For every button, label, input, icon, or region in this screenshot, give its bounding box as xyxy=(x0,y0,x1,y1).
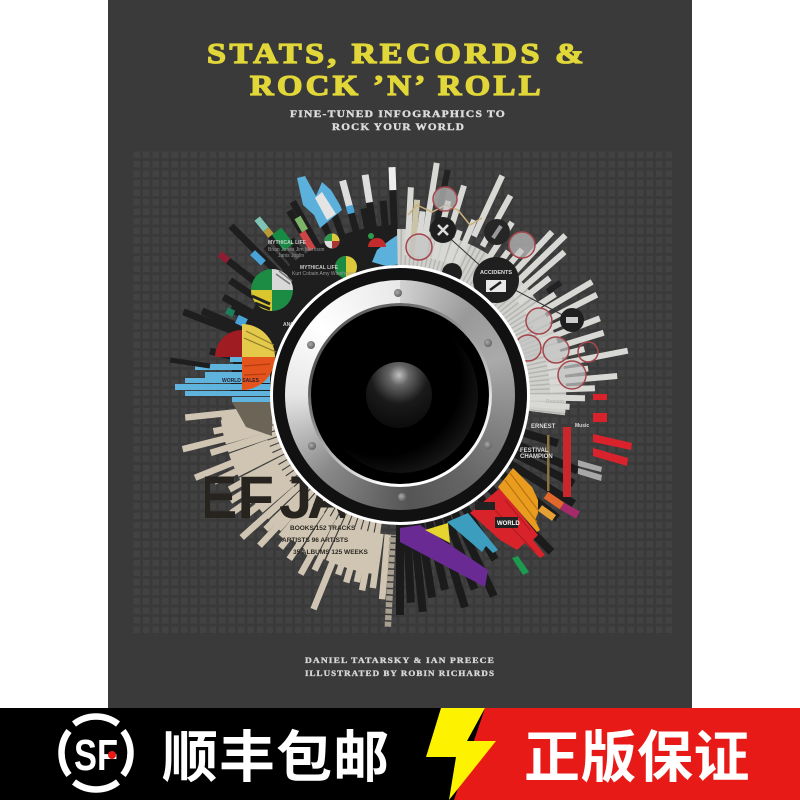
label: Def Jam: J xyxy=(279,464,312,531)
labels: right small text: WORLD xyxy=(497,521,520,527)
subtitle xyxy=(290,110,506,133)
labels: dark tags on red band xyxy=(475,502,518,528)
labels: upper left small text: Brian Jones Jim Morrison xyxy=(268,247,325,253)
ray: green tip xyxy=(512,556,529,575)
sector: black rays lower right xyxy=(400,430,578,615)
book cover artwork xyxy=(108,0,692,708)
sector: brown band xyxy=(232,402,272,436)
radial data burst xyxy=(154,163,632,627)
ray: black left bar xyxy=(170,360,210,366)
speaker: inner rim xyxy=(308,303,492,487)
text: Def Jam stats: BOOKS/152 TRACKS xyxy=(290,525,356,532)
labels: right small text: Music xyxy=(575,423,589,429)
speaker: dust cap xyxy=(366,362,432,428)
labels: right small text: CHAMPION xyxy=(520,454,553,460)
banner: red panel and lightning bolt xyxy=(426,708,800,800)
title: ROCK ’N’ ROLL xyxy=(250,70,544,102)
pie: green yellow white xyxy=(251,269,293,311)
authors: DANIEL TATARSKY & IAN PREECE xyxy=(305,655,495,665)
pie: green and yellow xyxy=(335,256,357,278)
sector: red band xyxy=(470,488,545,558)
bars: grey group xyxy=(578,460,602,481)
text: Def Jam stats xyxy=(282,525,369,556)
title xyxy=(207,38,587,102)
speaker: metal ring xyxy=(285,280,515,510)
sector: tan bars lower left xyxy=(183,411,393,627)
bar: thin brown xyxy=(547,435,550,491)
bars: red slanted group xyxy=(593,394,632,466)
badge: small top xyxy=(442,263,462,283)
label: Def Jam: A xyxy=(307,464,350,531)
icon: blue and white block chart xyxy=(297,176,342,228)
authors: ILLUSTRATED BY ROBIN RICHARDS xyxy=(305,668,495,678)
title: STATS, RECORDS & xyxy=(207,38,587,70)
pie: small multi colour xyxy=(324,234,340,248)
badge: small right xyxy=(560,308,584,332)
labels: upper left small text: ANGEL xyxy=(283,322,300,328)
label: Def Jam: DEF xyxy=(154,464,274,531)
badge: guitar icon xyxy=(484,219,510,245)
banner: SF logo xyxy=(58,713,134,793)
ray: orange and magenta xyxy=(546,495,562,506)
coloured ray tips upper left xyxy=(220,167,393,335)
labels: upper left small text: WORLD SALES xyxy=(222,378,260,384)
badge: accidents xyxy=(473,257,519,303)
sector: blue band xyxy=(447,513,498,553)
bar: tall red xyxy=(563,427,571,497)
banner: SF logo: SF xyxy=(74,731,118,780)
pie: red yellow orange xyxy=(215,324,276,390)
sector: dark rays upper left xyxy=(183,167,396,393)
speaker: screws xyxy=(307,289,492,501)
squiggle: tan line chart xyxy=(408,205,482,225)
speaker: cone surround xyxy=(311,306,489,484)
label: Def Jam: M xyxy=(345,464,395,531)
promo banner xyxy=(0,708,800,800)
text: Def Jam stats: ARTISTS 96 ARTISTS xyxy=(282,537,349,544)
labels: upper left small text: MYTHICAL LIFE xyxy=(300,265,339,271)
labels: right small text xyxy=(497,399,589,527)
sector: grey bars upper right xyxy=(398,163,628,413)
speaker: black surround xyxy=(273,268,527,522)
subtitle: ROCK YOUR WORLD xyxy=(332,123,465,133)
speaker xyxy=(270,265,530,525)
badge: cross icon xyxy=(430,217,456,243)
ray: magenta tip xyxy=(562,506,578,515)
labels: upper left small text: Janis Joplin xyxy=(278,253,304,259)
badge: accidents: ACCIDENTS xyxy=(480,270,512,276)
subtitle: FINE-TUNED INFOGRAPHICS TO xyxy=(290,110,506,120)
labels: upper left small text: MYTHICAL LIFE xyxy=(268,240,307,246)
banner: free shipping text: 顺丰包邮 xyxy=(162,713,390,794)
banner: genuine guarantee text: 正版保证 xyxy=(524,713,750,794)
sector: yellow band xyxy=(425,523,450,543)
map: blue region with red marker xyxy=(368,232,402,266)
authors xyxy=(305,655,495,678)
labels: right small text: FESTIVAL xyxy=(520,448,549,454)
sector: blue horizontal bars xyxy=(175,356,270,402)
connector lines xyxy=(443,232,572,320)
labels: right small text: Reason xyxy=(546,399,564,405)
labels: upper left small text: Kurt Cobain Amy Winehouse xyxy=(292,271,356,277)
text: Def Jam stats: 35 ALBUMS 125 WEEKS xyxy=(293,549,369,556)
speaker: cone xyxy=(322,317,478,473)
ray: orange short xyxy=(540,508,554,518)
sector: purple band xyxy=(400,525,488,587)
red ring annotations xyxy=(406,187,598,389)
sector: orange band xyxy=(498,468,540,532)
labels: upper left small text xyxy=(222,240,356,384)
labels: right small text: ERNEST xyxy=(531,424,556,430)
